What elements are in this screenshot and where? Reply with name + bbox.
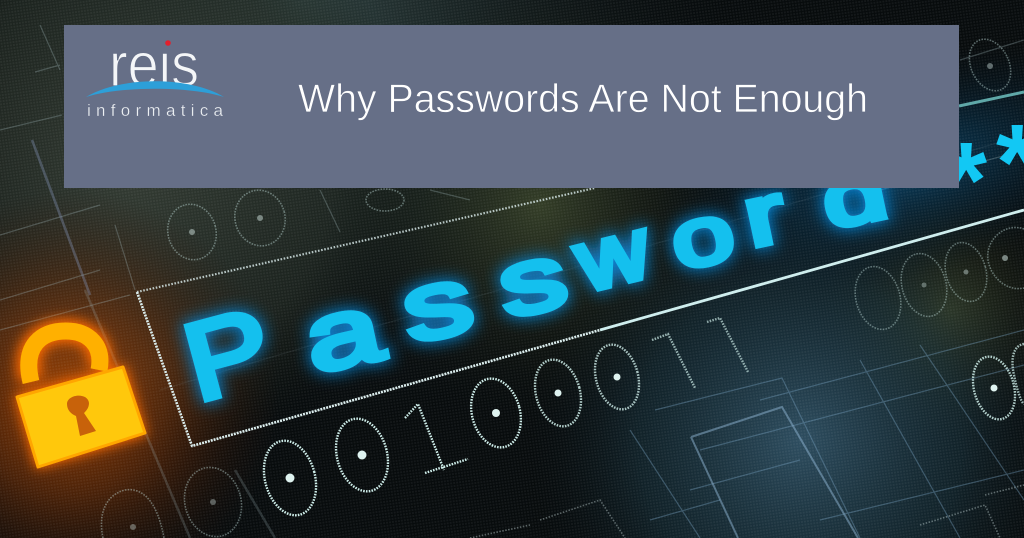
frame around password field	[137, 92, 1024, 446]
header panel	[64, 25, 959, 188]
password word glow	[172, 147, 894, 425]
password word glow: s	[489, 223, 575, 338]
password word glow: s	[392, 245, 482, 363]
password word: d	[814, 147, 894, 245]
password word glow: a	[295, 272, 390, 393]
password word	[172, 147, 894, 425]
password word: o	[663, 185, 742, 287]
logo: reis informatica	[86, 31, 224, 120]
title: Why Passwords Are Not Enough	[298, 77, 868, 121]
password word glow: P	[172, 285, 285, 425]
password word glow: r	[735, 164, 793, 265]
icon: glowing padlock	[15, 331, 147, 469]
password word: P	[172, 285, 285, 425]
password word glow: d	[814, 147, 894, 245]
logo: reis informatica: informatica	[87, 101, 224, 120]
password word: w	[565, 199, 660, 310]
password word: a	[295, 272, 390, 393]
logo: reis informatica: reis	[109, 31, 199, 100]
password word glow: o	[663, 185, 742, 287]
password word: s	[489, 223, 575, 338]
password word: r	[735, 164, 793, 265]
digit centre dots	[130, 63, 1008, 530]
masked asterisks: *	[945, 119, 987, 240]
password word glow: w	[565, 199, 660, 310]
password word: s	[392, 245, 482, 363]
masked asterisks	[945, 101, 1024, 240]
